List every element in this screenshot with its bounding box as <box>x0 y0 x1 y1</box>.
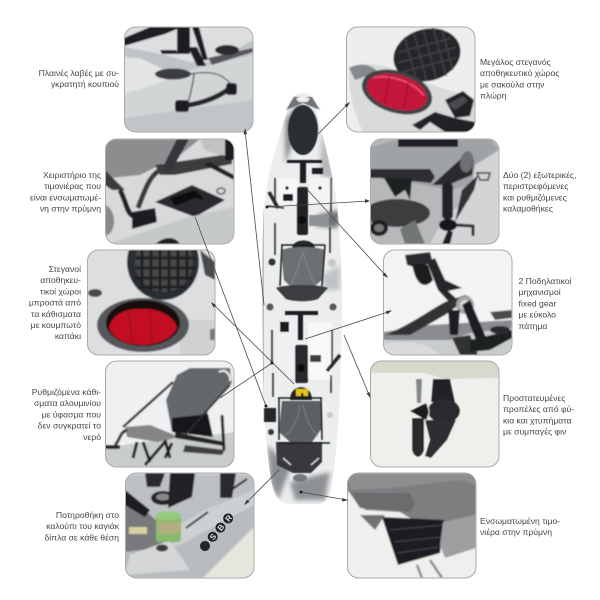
text: hatches: με κουμπωτό <box>31 320 81 330</box>
text: hatches: Στεγανοί <box>49 264 81 274</box>
logo: B <box>216 522 227 533</box>
panel: rudder control <box>105 139 234 244</box>
logo <box>198 511 235 553</box>
text: hatches: μπροστά από <box>29 298 81 308</box>
text: seats: με ύφασμα που <box>42 409 101 419</box>
kayak top view <box>262 93 342 504</box>
text: hatches: καπάκι <box>55 331 81 341</box>
arrow: bow hatch <box>317 102 350 135</box>
logo: S <box>208 532 219 542</box>
text: seats: σματα αλουμινίου <box>34 398 101 408</box>
arrow: hatches <box>211 302 294 384</box>
text: side handles: γκρατητή κουπιού <box>51 79 119 89</box>
arrow: side handles <box>244 128 264 305</box>
text: bow hatch: αποθηκευτικό χώρος <box>480 68 559 78</box>
text: hatches: αποθηκευ- <box>40 275 81 285</box>
front seat <box>292 240 315 248</box>
arrow: seats <box>220 363 272 398</box>
text: side handles: Πλαινές λαβές με συ- <box>39 68 119 78</box>
text: rudder: νιέρα στην πρύμνη <box>480 527 552 537</box>
text: rudder control: νη στην πρύμνη <box>40 204 101 214</box>
text: bow hatch: Μεγάλος στεγανός <box>480 57 551 67</box>
text: seats: Ρυθμιζόμενα κάθι- <box>32 387 101 397</box>
panel: rod holders <box>364 139 499 244</box>
text: hatches: τικοί χώροι <box>40 286 81 296</box>
text: rod holders: και ρυθμιζόμενες <box>503 192 567 202</box>
arrow: pedal drive top <box>305 187 388 278</box>
text: rudder control: είναι ενσωματωμέ- <box>30 192 101 202</box>
text: pedal drive: fixed gear <box>518 298 556 308</box>
text: propeller: με συμπαγές φιν <box>503 427 566 437</box>
arrow: propeller <box>344 335 370 398</box>
text: cup holder: Ποτηροθήκη στο <box>56 510 119 520</box>
arrow: rudder <box>301 492 348 502</box>
panel: integrated rudder <box>347 473 476 578</box>
arrow: rod holders <box>267 199 370 207</box>
bow hatch <box>288 105 318 155</box>
text: rod holders: περιστρεφόμενες <box>503 181 568 191</box>
panel: large bow hatch <box>346 21 475 132</box>
text: propeller: κια και χτυπήματα <box>503 415 572 425</box>
panel: propeller and fin <box>370 361 499 467</box>
text: rudder control: Χειριστήριο της <box>43 170 101 180</box>
text: bow hatch: πλώρη <box>480 91 507 101</box>
text: rudder: Ενσωματωμένη τιμο- <box>480 516 560 526</box>
panel: cup holder <box>125 473 254 578</box>
text: bow hatch: με σακούλα στην <box>480 79 544 89</box>
arrow: pedal drive bottom <box>305 310 392 339</box>
text: seats: νερό <box>83 432 101 442</box>
text: pedal drive: πάτημα <box>518 321 547 331</box>
panel: side handles <box>124 27 253 132</box>
logo: R <box>223 513 234 524</box>
text: cup holder: καλούπι του καγιάκ <box>46 521 120 531</box>
panel: watertight hatches <box>87 250 216 356</box>
text: rod holders: Δύο (2) εξωτερικές, <box>503 170 576 180</box>
text: rod holders: καλαμοθήκες <box>503 204 553 214</box>
text: rudder control: τιμονιέρας που <box>44 181 101 191</box>
arrows <box>195 102 392 505</box>
text: pedal drive: με εύκολο <box>518 310 556 320</box>
text: pedal drive: 2 Ποδηλατικοί <box>518 276 572 286</box>
text: pedal drive: μηχανισμοί <box>518 287 561 297</box>
arrow: cup holder <box>244 470 279 505</box>
text: cup holder: δίπλα σε κάθε θέση <box>44 532 119 542</box>
text: propeller: προπέλες από φύ- <box>503 404 574 414</box>
rear section <box>277 323 296 383</box>
panel: pedal drive <box>383 250 512 355</box>
text: hatches: τα κάθισματα <box>31 309 81 319</box>
arrow: rudder control <box>195 217 266 406</box>
text: seats: δεν συγκρατεί το <box>38 421 101 431</box>
panel: adjustable seats <box>105 361 234 467</box>
text: propeller: Προστατευμένες <box>503 393 565 403</box>
